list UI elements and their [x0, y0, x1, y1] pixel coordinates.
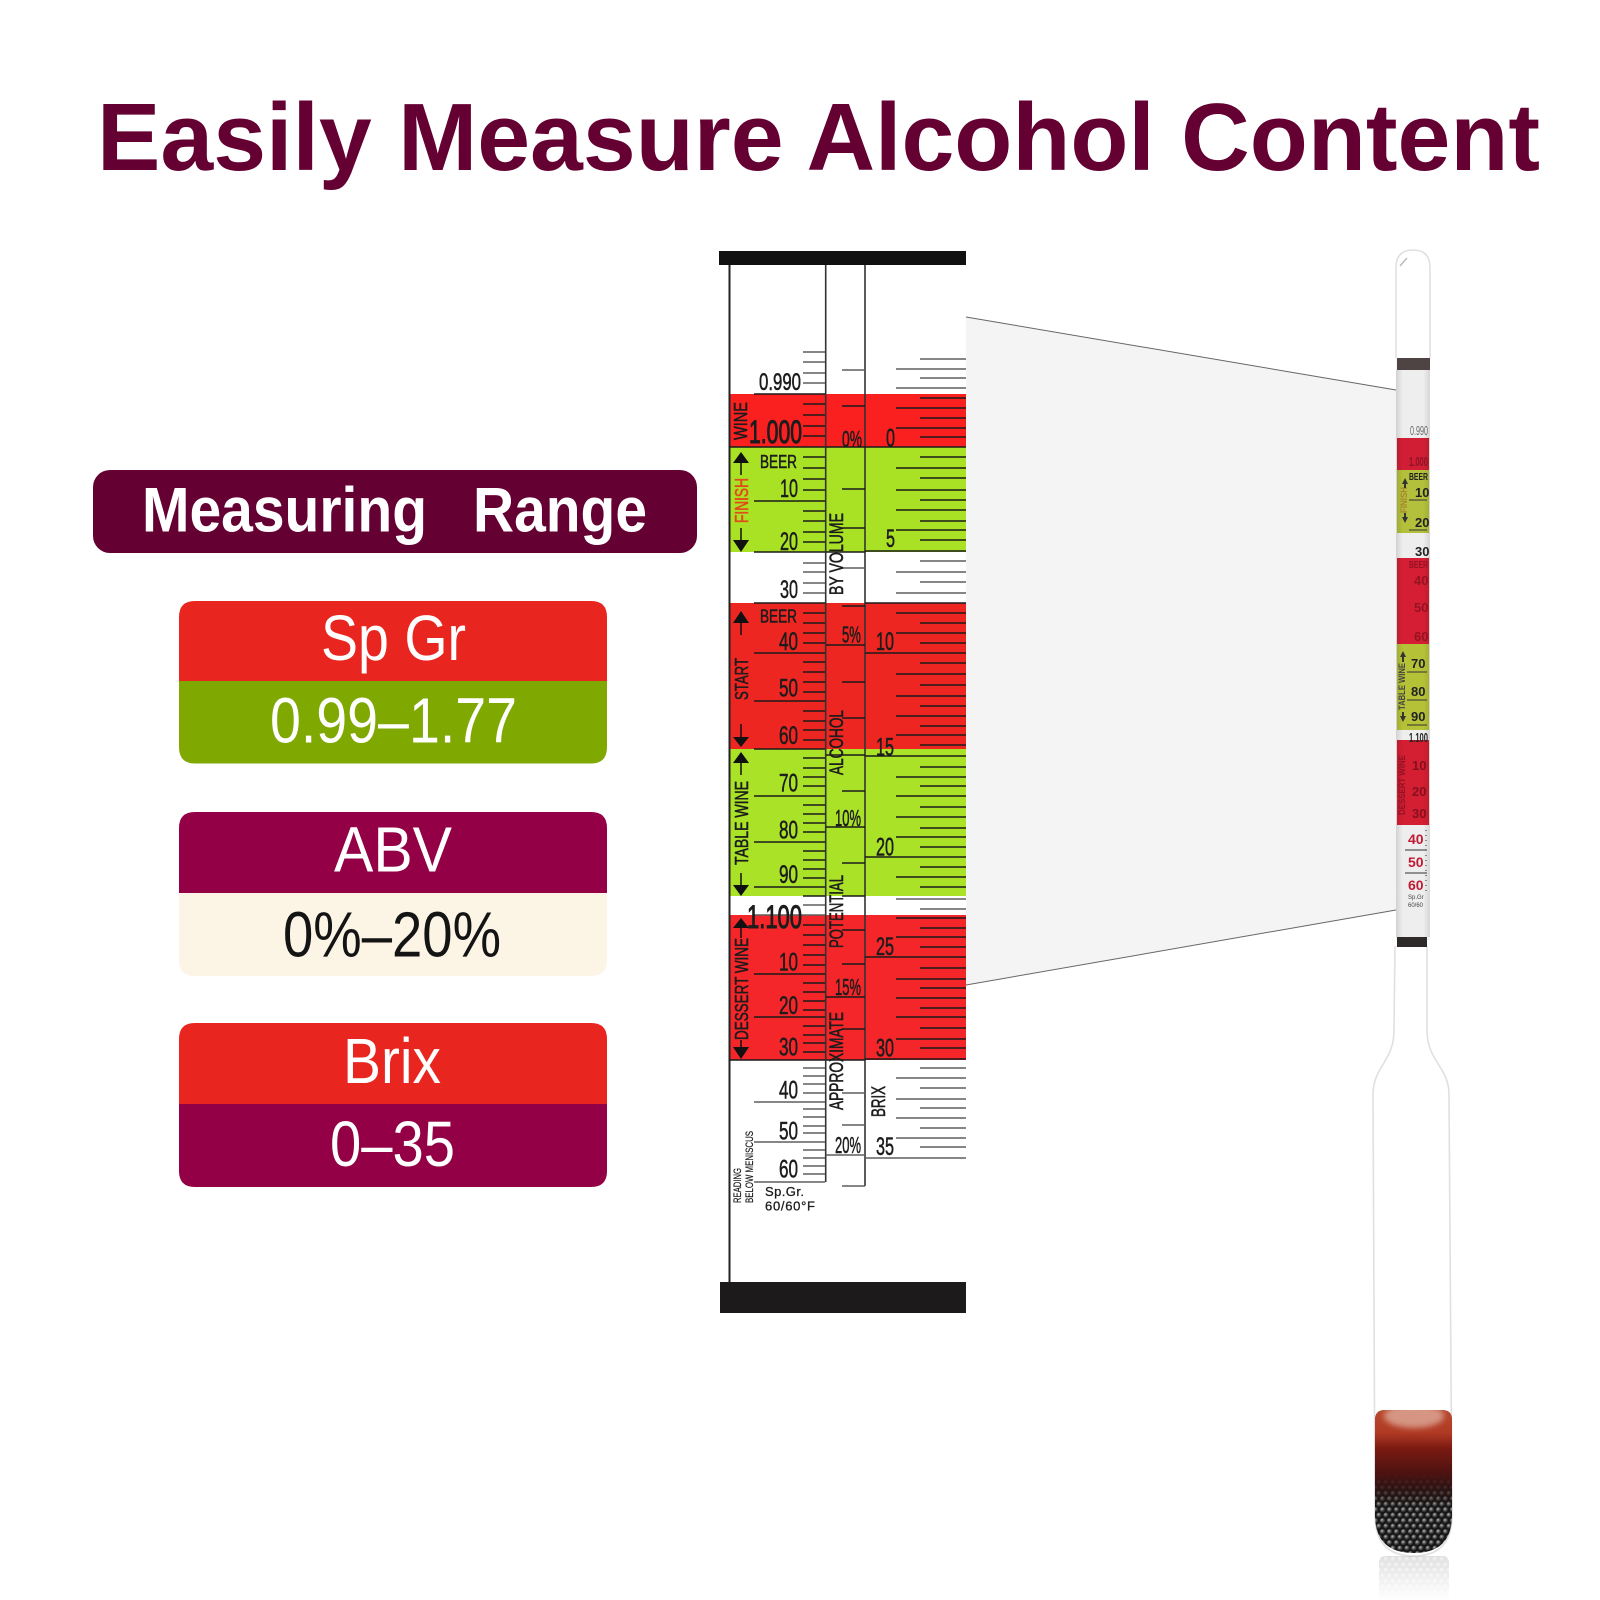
specific gravity numbers: 80 — [779, 816, 798, 844]
tube scale numbers: 10 — [1412, 758, 1426, 773]
specific gravity numbers: Sp.Gr. — [765, 1184, 804, 1199]
tube scale numbers: 1.100 — [1409, 730, 1428, 745]
brix numbers: 10 — [876, 628, 894, 656]
tube scale numbers: 60 — [1414, 629, 1428, 644]
specific gravity numbers: 10 — [780, 475, 798, 503]
panel: measuring range — [93, 470, 697, 1187]
zone arrows — [733, 452, 749, 1059]
specific gravity numbers: BEER — [760, 607, 797, 627]
glass outline — [1373, 250, 1452, 1556]
card: ABV: ABV — [334, 814, 452, 886]
tube scale numbers: 0.990 — [1410, 423, 1428, 438]
heading pill: measuring range — [93, 470, 697, 553]
brix numbers: 15 — [876, 734, 894, 762]
specific gravity numbers: BEER — [760, 452, 797, 472]
specific gravity numbers: 60/60°F — [765, 1199, 815, 1214]
specific gravity numbers: 60 — [779, 1155, 798, 1183]
tube scale numbers: 50 — [1408, 854, 1424, 870]
heading pill: measuring range: Range — [473, 476, 647, 546]
tube scale numbers: 40 — [1408, 831, 1424, 847]
glass tip highlight — [1400, 258, 1407, 266]
alcohol percent numbers: 5% — [842, 622, 861, 648]
rotated zone labels: BELOW MENISCUS — [744, 1131, 756, 1203]
specific gravity numbers: 90 — [779, 861, 798, 889]
rotated zone labels: APPROXIMATE — [827, 1012, 848, 1110]
printed scale cylinder — [1396, 358, 1430, 947]
alcohol percent numbers: 10% — [835, 805, 861, 831]
heading pill: measuring range: Measuring — [142, 476, 427, 546]
specific gravity numbers: 1.100 — [747, 899, 802, 935]
tube scale numbers: 90 — [1411, 709, 1425, 724]
rotated zone labels: BY VOLUME — [827, 513, 848, 595]
scale frame — [719, 251, 966, 1313]
tube scale numbers: 10 — [1415, 485, 1429, 500]
specific gravity numbers: 30 — [779, 1034, 798, 1062]
title: Easily Measure Alcohol Content — [97, 84, 1540, 191]
specific gravity numbers: 0.990 — [759, 369, 801, 396]
rotated zone labels: TABLE WINE — [732, 781, 752, 865]
rotated zone labels — [731, 402, 890, 1203]
specific gravity numbers: 20 — [780, 528, 798, 556]
alcohol percent numbers — [835, 426, 862, 1158]
tube scale numbers: 40 — [1414, 573, 1428, 588]
card: brix — [179, 1023, 607, 1187]
tick marks: dark on coloured areas — [729, 394, 966, 1060]
tube scale numbers: 30 — [1412, 806, 1426, 821]
tube scale numbers: 50 — [1414, 600, 1428, 615]
tube scale numbers: 60 — [1408, 877, 1424, 893]
alcohol percent numbers: 0% — [842, 426, 862, 452]
rotated zone labels: WINE — [731, 402, 751, 440]
card: ABV: 0%–20% — [283, 899, 501, 971]
brix numbers: 35 — [876, 1133, 894, 1161]
tube scale numbers: FINISH — [1399, 487, 1409, 513]
ballast reflection — [1379, 1556, 1449, 1600]
tube scale numbers: 80 — [1411, 684, 1425, 699]
card: specific gravity: Sp Gr — [321, 602, 466, 674]
tube scale numbers: 1.000 — [1409, 454, 1428, 469]
card: ABV — [179, 812, 607, 976]
hydrometer tube — [1373, 250, 1452, 1600]
alcohol percent numbers: 15% — [835, 974, 861, 1000]
specific gravity numbers: 10 — [779, 949, 798, 977]
enlarged hydrometer scale — [719, 251, 966, 1313]
brix numbers: 20 — [876, 834, 894, 862]
card: specific gravity — [179, 601, 607, 764]
rotated zone labels: START — [732, 658, 752, 700]
tube scale numbers: Sp.Gr — [1408, 895, 1424, 901]
magnification funnel — [966, 317, 1396, 985]
rotated zone labels: READING — [732, 1168, 744, 1203]
tube arrows — [1400, 478, 1408, 722]
specific gravity numbers: 40 — [779, 1076, 798, 1104]
specific gravity numbers: 50 — [779, 1117, 798, 1145]
specific gravity numbers: 20 — [779, 992, 798, 1020]
brix numbers: 5 — [886, 525, 895, 553]
specific gravity numbers: 30 — [780, 576, 798, 604]
brix numbers: 0 — [886, 425, 895, 453]
tube scale numbers: 30 — [1415, 544, 1429, 559]
specific gravity numbers: 40 — [779, 628, 798, 656]
rotated zone labels: POTENTIAL — [827, 875, 848, 948]
tube scale numbers: BEER — [1409, 560, 1429, 571]
brix numbers — [876, 425, 895, 1161]
specific gravity numbers: 60 — [779, 722, 798, 750]
tube scale numbers: 20 — [1412, 784, 1426, 799]
card: specific gravity: 0.99–1.77 — [270, 685, 517, 757]
card: brix: 0–35 — [330, 1108, 455, 1180]
rotated zone labels: BRIX — [869, 1086, 890, 1117]
tube scale numbers: 60/60 — [1408, 903, 1424, 909]
tube scale numbers: DESSERT WINE — [1397, 755, 1407, 815]
tube scale numbers — [1397, 423, 1429, 909]
alcohol percent numbers: 20% — [835, 1132, 861, 1158]
tick marks: grey on white areas — [754, 352, 966, 1186]
colour bands — [729, 394, 966, 1060]
rotated zone labels: FINISH — [732, 478, 752, 523]
specific gravity numbers — [747, 369, 815, 1214]
card: brix: Brix — [343, 1025, 441, 1097]
rotated zone labels: DESSERT WINE — [732, 938, 752, 1040]
tube scale numbers: BEER — [1409, 472, 1429, 483]
tube scale numbers: TABLE WINE — [1397, 663, 1407, 710]
tube scale numbers: 70 — [1411, 656, 1425, 671]
brix numbers: 25 — [876, 933, 894, 961]
specific gravity numbers: 1.000 — [749, 414, 802, 450]
specific gravity numbers: 50 — [779, 675, 798, 703]
rotated zone labels: ALCOHOL — [827, 710, 848, 775]
ballast: liquid and beads — [1375, 1404, 1452, 1553]
specific gravity numbers: 70 — [779, 770, 798, 798]
brix numbers: 30 — [876, 1035, 894, 1063]
tube scale numbers: 20 — [1415, 515, 1429, 530]
